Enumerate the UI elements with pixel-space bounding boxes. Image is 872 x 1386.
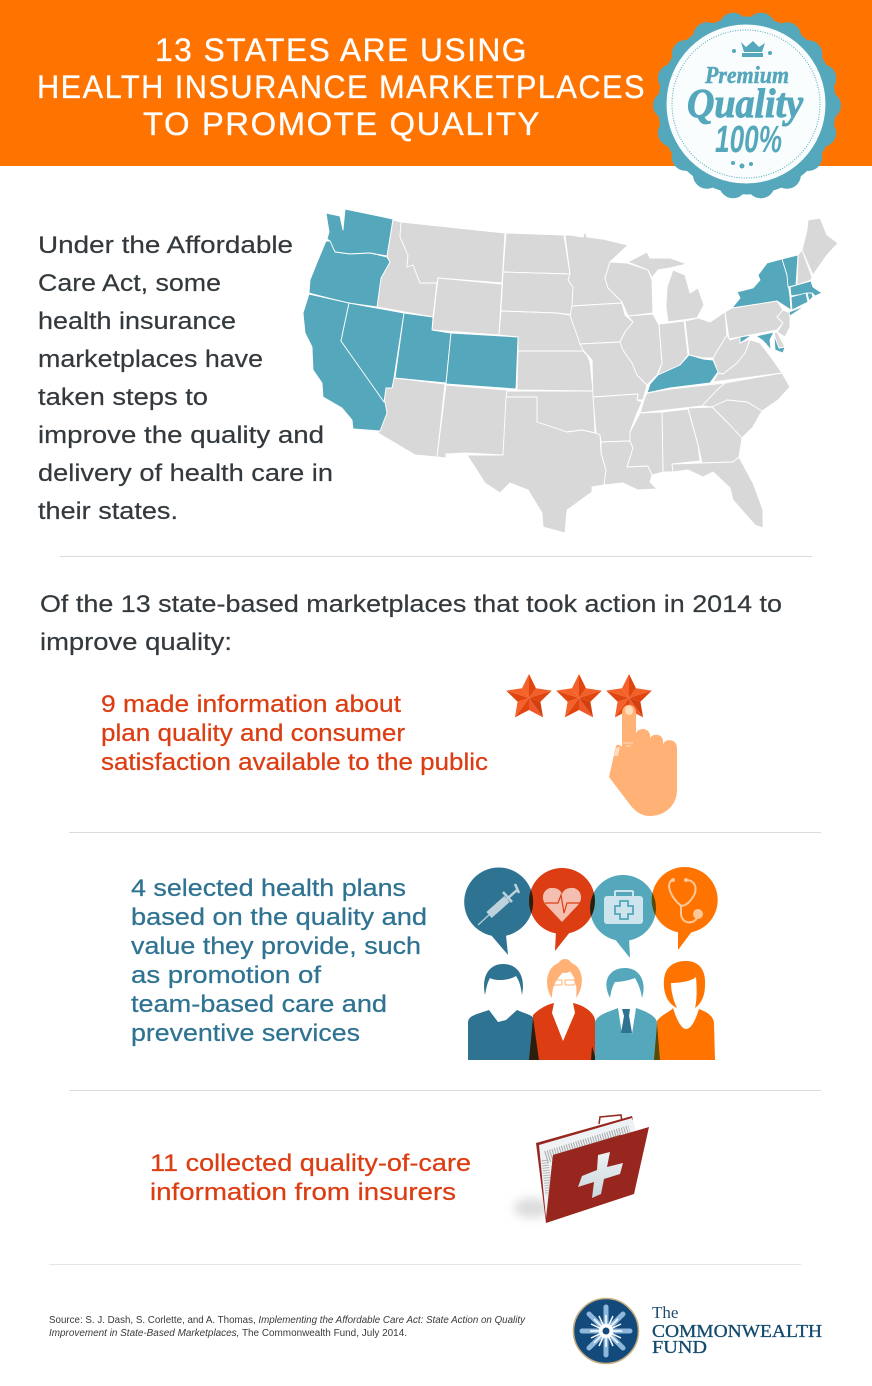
finding: 9 made information available: satisfaction available to the public xyxy=(101,749,488,776)
title: 13 STATES ARE USING xyxy=(155,32,528,68)
divider xyxy=(49,1264,801,1265)
finding: 4 selected health plans: preventive services xyxy=(131,1020,360,1047)
finding: 11 collected information: information from insurers xyxy=(150,1179,456,1206)
icon: three stars and pointing hand xyxy=(506,674,677,816)
intro text: their states. xyxy=(38,498,178,525)
person 3 xyxy=(595,968,657,1060)
source note xyxy=(49,1315,526,1339)
finding: 9 made information available: 9 made information about xyxy=(101,691,401,718)
overlap: first and second bubbles xyxy=(529,890,534,914)
header banner xyxy=(0,0,872,166)
section intro text xyxy=(40,591,782,656)
title: TO PROMOTE QUALITY xyxy=(143,106,541,142)
US map xyxy=(303,209,838,533)
bubble: medical kit xyxy=(590,875,656,958)
title: HEALTH INSURANCE MARKETPLACES xyxy=(37,69,646,105)
person 4 xyxy=(654,961,715,1060)
bubble: stethoscope xyxy=(652,867,718,950)
person 2 xyxy=(529,959,596,1060)
finding: 4 selected health plans: as promotion of xyxy=(131,962,321,989)
divider xyxy=(60,556,812,557)
icon: crown xyxy=(741,41,765,52)
overlap: second and third bubbles xyxy=(590,892,595,916)
finding: 4 selected health plans: team-based care and xyxy=(131,991,387,1018)
divider xyxy=(69,832,821,833)
finding: 4 selected health plans xyxy=(131,875,427,1047)
finding: 4 selected health plans: based on the quality and xyxy=(131,904,427,931)
finding: 11 collected information xyxy=(150,1150,471,1206)
title xyxy=(37,32,646,142)
badge: premium quality 100%: Quality xyxy=(687,80,804,126)
intro text: improve the quality and xyxy=(38,422,324,449)
intro text: Care Act, some xyxy=(38,270,221,297)
logo: The Commonwealth Fund: FUND xyxy=(652,1337,707,1357)
divider xyxy=(69,1090,821,1091)
intro text: Under the Affordable xyxy=(38,232,293,259)
overlap: third and fourth bubbles xyxy=(652,893,656,916)
intro text: delivery of health care in xyxy=(38,460,333,487)
source note: Source: S. J. Dash, S. Corlette, and A. Thomas, Implementing the Affordable Care Act: State Action on Quality xyxy=(49,1315,526,1326)
non-participating states xyxy=(377,218,838,533)
logo: The Commonwealth Fund: COMMONWEALTH xyxy=(652,1321,822,1341)
finding: 9 made information available xyxy=(101,691,488,776)
section intro text: improve quality: xyxy=(40,629,232,656)
bubble: heart xyxy=(529,868,595,951)
badge: premium quality 100%: Premium xyxy=(704,63,789,89)
finding: 11 collected information: 11 collected quality-of-care xyxy=(150,1150,471,1177)
highlighted states xyxy=(303,209,822,431)
logo: The Commonwealth Fund xyxy=(574,1298,822,1364)
intro text: taken steps to xyxy=(38,384,208,411)
bubble: syringe xyxy=(464,868,533,955)
finding: 9 made information available: plan quality and consumer xyxy=(101,720,405,747)
finding: 4 selected health plans: value they provide, such xyxy=(131,933,421,960)
source note: Improvement in State-Based Marketplaces, The Commonwealth Fund, July 2014. xyxy=(49,1328,407,1339)
logo: The Commonwealth Fund: The xyxy=(652,1303,678,1322)
intro text xyxy=(38,232,333,525)
finding: 4 selected health plans: 4 selected health plans xyxy=(131,875,406,902)
icon group: speech bubbles and people xyxy=(464,867,718,1060)
badge: premium quality 100% xyxy=(658,16,836,194)
intro text: health insurance xyxy=(38,308,236,335)
badge: premium quality 100%: 100% xyxy=(715,119,782,161)
person 1 xyxy=(468,964,535,1060)
intro text: marketplaces have xyxy=(38,346,263,373)
icon: medical folder xyxy=(514,1115,649,1223)
logo emblem xyxy=(574,1298,638,1364)
section intro text: Of the 13 state-based marketplaces that took action in 2014 to xyxy=(40,591,782,618)
